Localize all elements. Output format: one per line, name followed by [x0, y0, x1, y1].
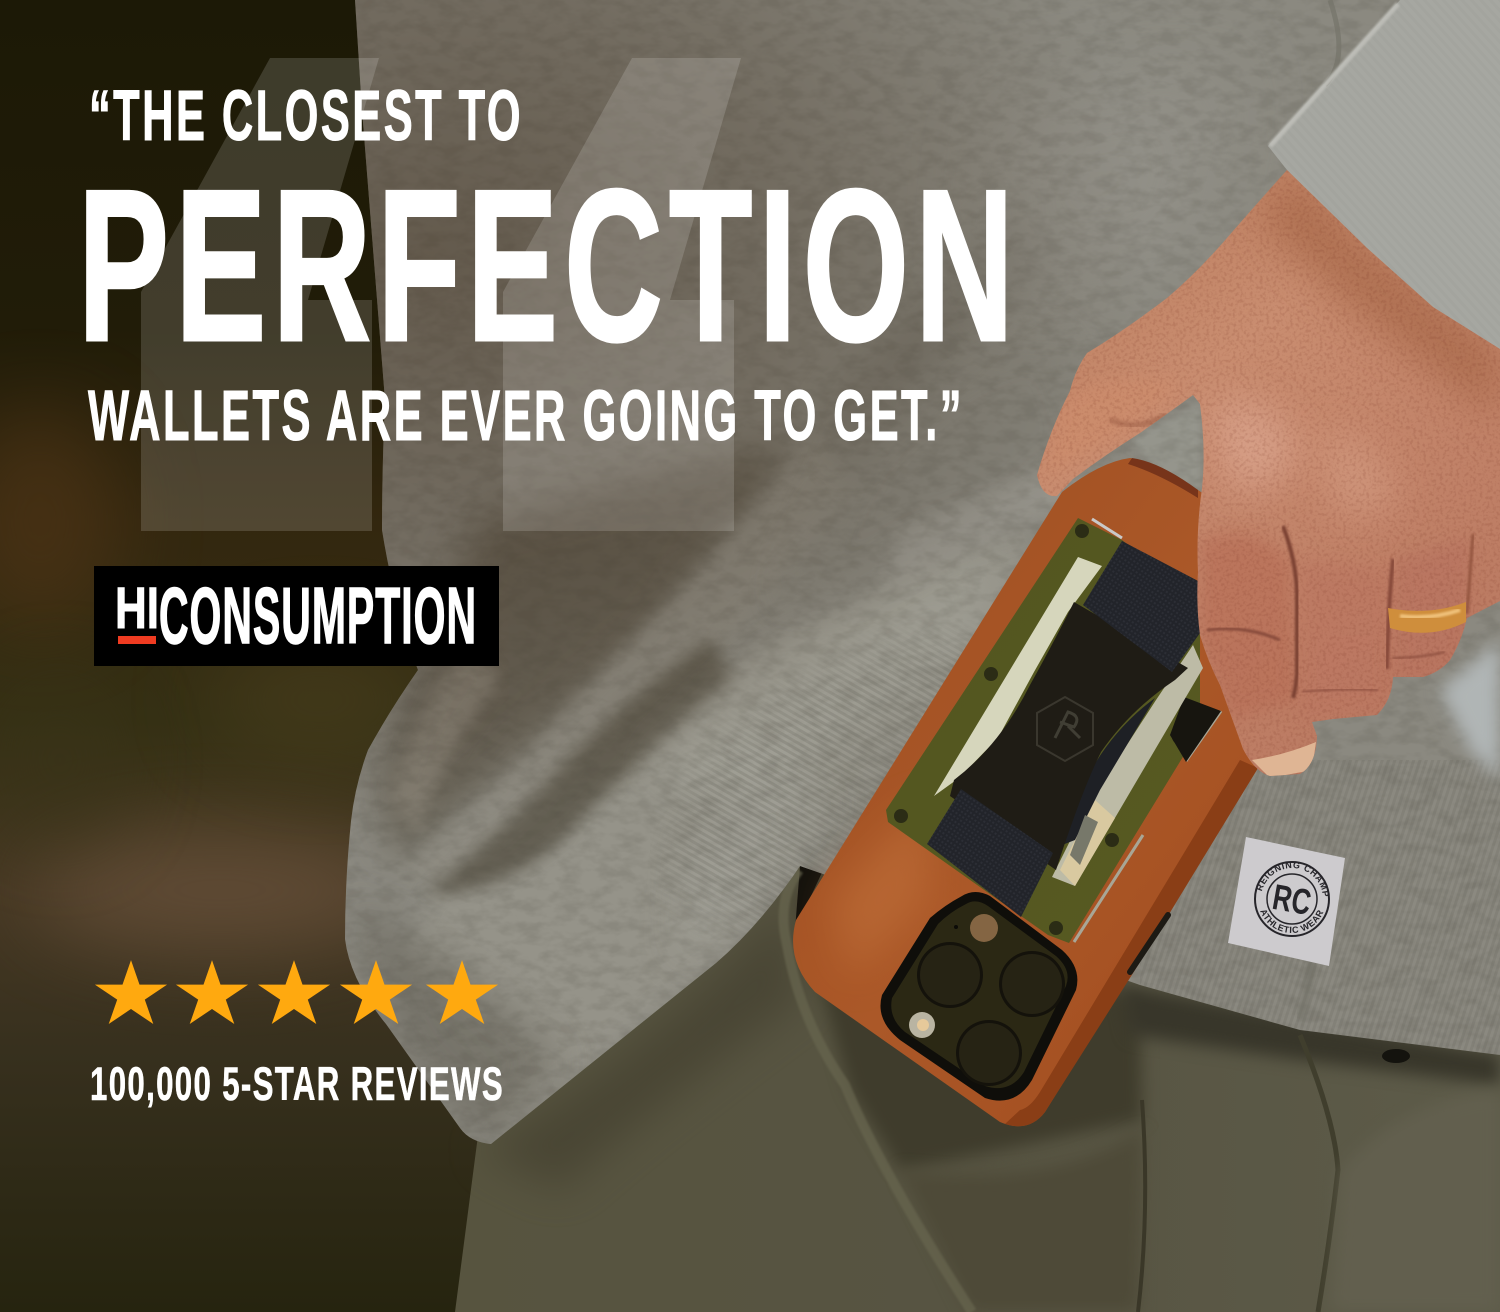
pocket stitched edge: [783, 870, 972, 1312]
headline: wallets are ever going to get: WALLETS ARE EVER GOING TO GET.”: [88, 377, 964, 456]
elastic strap top: [1083, 541, 1200, 672]
sleeve cuff: [1268, 0, 1500, 352]
sweatshirt woven label: REIGNING CHAMP: [1257, 863, 1328, 896]
elastic strap bottom: [927, 789, 1053, 917]
card: [934, 557, 1102, 796]
wallet black centre plate: [950, 602, 1188, 870]
wallet metal plate: [886, 518, 1221, 943]
large translucent quotation mark: [141, 58, 741, 531]
logo: HiConsumption: HI: [115, 576, 159, 641]
camera module: [880, 892, 1077, 1101]
sweater folds: [345, 60, 1240, 1150]
brown tint behind headline: [355, 0, 1060, 740]
sweatshirt woven label: RC: [1270, 876, 1314, 923]
logo: HiConsumption: [94, 566, 499, 666]
ribbed hem: [1300, 962, 1314, 1020]
photo: hand holding phone: [1030, 160, 1500, 790]
hand shading: [1260, 170, 1500, 420]
sweatshirt woven label: [1228, 837, 1345, 966]
ribbed knit texture: [676, 648, 960, 914]
photo: olive trousers: [455, 860, 1500, 1312]
lower right sleeve: [1440, 640, 1500, 780]
side button: [1130, 915, 1168, 972]
logo: HiConsumption: CONSUMPTION: [159, 571, 477, 660]
fabric mottling: [340, 0, 1500, 1160]
five-star rating: [95, 960, 498, 1024]
headline: the closest to: “THE CLOSEST TO: [89, 77, 523, 156]
photo: grey sweatshirt: [345, 0, 1500, 1144]
review count: 100,000 5-STAR REVIEWS: [90, 1057, 504, 1110]
gold ring: [1388, 602, 1466, 633]
banknote: [1052, 645, 1221, 886]
finger creases: [1283, 526, 1297, 698]
sweatshirt woven label: ATHLETIC WEAR: [1260, 910, 1324, 933]
photo: phone in leather case: [793, 458, 1300, 1126]
